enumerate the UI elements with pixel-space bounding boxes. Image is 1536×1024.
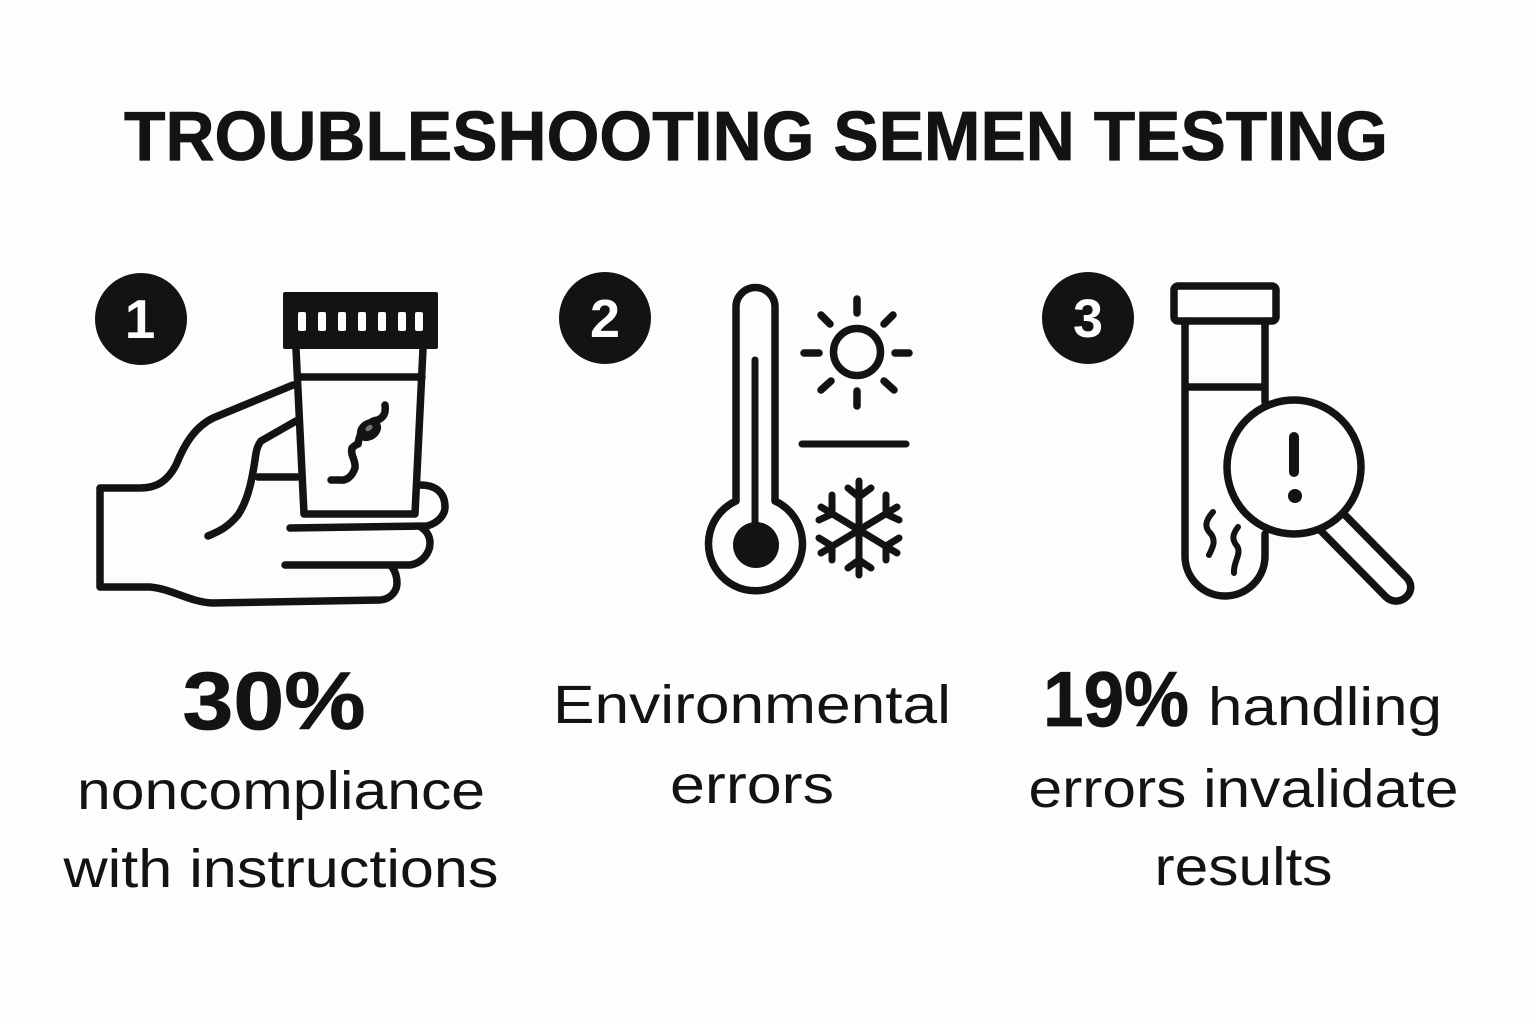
- divider between hot and cold: [802, 440, 906, 448]
- text: 19% handling errors invalidate results: results: [1154, 837, 1332, 897]
- text: environmental errors: errors: [670, 755, 834, 815]
- title: TROUBLESHOOTING SEMEN TESTING: [124, 97, 1388, 175]
- panel: environmental errors: [553, 272, 951, 815]
- badge 1: [95, 273, 187, 365]
- badge 3: 3: [1073, 289, 1103, 349]
- text: noncompliance with instructions: noncompliance: [77, 761, 485, 821]
- icon: test tube: [1174, 286, 1276, 596]
- badge 2: [559, 272, 651, 364]
- panel: noncompliance: [62, 273, 499, 899]
- badge 1: 1: [125, 288, 155, 350]
- panel: handling errors: [1028, 272, 1458, 897]
- text: 19% handling errors invalidate results: handling: [1208, 677, 1442, 737]
- badge 3: [1042, 272, 1134, 364]
- text: noncompliance with instructions: with instructions: [62, 839, 499, 899]
- icon: thermometer: [708, 288, 802, 591]
- icon: sun: [804, 299, 909, 406]
- text: environmental errors: Environmental: [553, 675, 951, 735]
- icon: snowflake: [819, 481, 899, 575]
- icon: hand holding specimen cup: [100, 292, 445, 603]
- stat: 30%: 30%: [182, 656, 366, 747]
- badge 2: 2: [590, 289, 620, 349]
- text: 19% handling errors invalidate results: 19%: [1043, 655, 1189, 743]
- text: 19% handling errors invalidate results: errors invalidate: [1028, 759, 1458, 819]
- icon: magnifying glass with exclamation: [1227, 400, 1411, 601]
